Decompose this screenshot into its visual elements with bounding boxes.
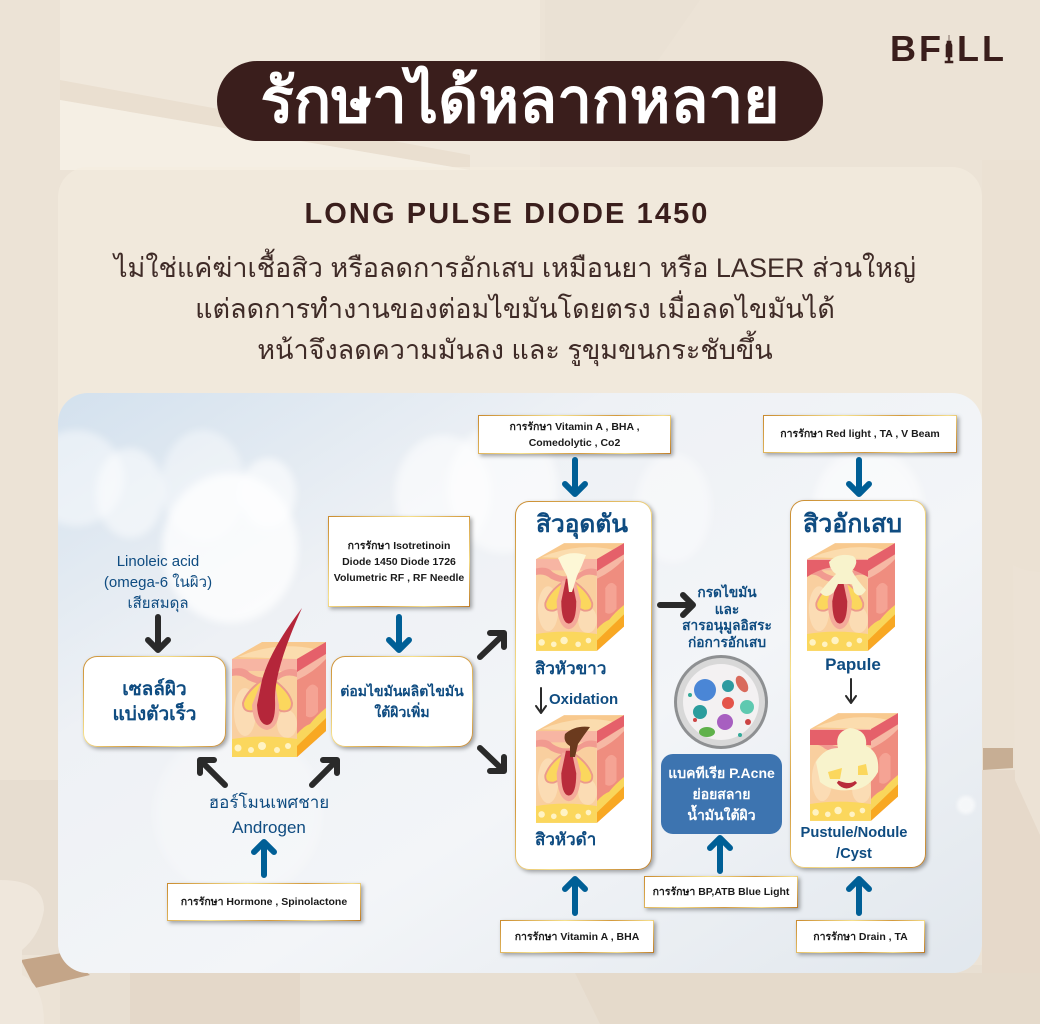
arrow: gland to blackhead	[480, 748, 504, 771]
label: linoleic acid: Linoleic acid	[117, 553, 199, 570]
text: fatty acids	[682, 584, 772, 650]
logo: BFILL: BFILL	[890, 28, 1007, 69]
panel: inflamed acne	[790, 500, 926, 868]
label: whitehead: สิวหัวขาว	[535, 659, 606, 678]
treatment: isotretinoin: Volumetric RF , RF Needle	[334, 572, 464, 584]
treatment: isotretinoin: การรักษา Isotretinoin	[348, 540, 450, 552]
label: pustule nodule cyst: /Cyst	[836, 846, 872, 862]
box: p acnes: น้ำมันใต้ผิว	[687, 806, 756, 822]
panel: cream content card	[58, 167, 982, 973]
treatment: comedone bottom	[500, 920, 654, 953]
icon: whitehead cube	[536, 543, 624, 651]
label: linoleic acid: เสียสมดุล	[127, 595, 189, 612]
icon: papule cube	[807, 543, 895, 651]
arrow: linoleic to cells	[148, 617, 168, 650]
arrow: top treatment to inflamed	[849, 460, 869, 494]
treatment: hormone	[167, 883, 361, 921]
text: fatty acids: ก่อการอักเสบ	[688, 634, 766, 650]
arrow: papule to cyst	[846, 679, 856, 703]
icon: hair follicle cube	[232, 608, 326, 757]
panel: diagram backdrop	[58, 393, 982, 973]
box: skin cells	[83, 656, 226, 747]
treatment: inflammation top: การรักษา Red light , TA , V Beam	[780, 428, 940, 440]
arrow: bottom treatment to comedone	[565, 879, 585, 913]
label: androgen	[209, 792, 329, 837]
text block: description: หน้าจึงลดความมันลง และ รูขุมขนกระชับขึ้น	[257, 335, 773, 365]
label: papule: Papule	[825, 655, 881, 674]
label: pustule nodule cyst: Pustule/Nodule	[801, 825, 907, 841]
arrow: gland to whitehead	[480, 633, 504, 657]
icon: syringe	[944, 35, 954, 64]
arrow: top treatment to comedone	[565, 460, 585, 494]
text: fatty acids: และ	[715, 602, 739, 616]
label: oxidation: Oxidation	[549, 691, 618, 708]
treatment: bacteria	[644, 876, 798, 908]
treatment: inflammation top	[763, 415, 957, 453]
arrow: androgen to cells	[200, 760, 225, 785]
heading: comedonal acne: สิวอุดตัน	[536, 511, 628, 538]
treatment: hormone: การรักษา Hormone , Spinolactone	[181, 896, 347, 908]
treatment: comedone bottom: การรักษา Vitamin A , BHA	[515, 930, 639, 942]
treatment: comedone top: การรักษา Vitamin A , BHA ,	[509, 420, 640, 432]
text block: description: แต่ลดการทำงานของต่อมไขมันโดยตรง เมื่อลดไขมันได้	[195, 294, 835, 324]
text: fatty acids: สารอนุมูลอิสระ	[682, 618, 772, 633]
treatment: drain	[796, 920, 925, 953]
treatment: bacteria: การรักษา BP,ATB Blue Light	[653, 886, 789, 898]
box: p acnes: แบคทีเรีย P.Acne	[668, 764, 775, 780]
label: blackhead: สิวหัวดำ	[535, 830, 596, 849]
panel: comedonal acne	[515, 501, 652, 870]
treatment: comedone top	[478, 415, 671, 454]
label: androgen: ฮอร์โมนเพศชาย	[209, 793, 329, 812]
box: skin cells: เซลล์ผิว	[122, 678, 187, 700]
treatment: isotretinoin	[328, 516, 470, 607]
text block: description	[112, 248, 916, 366]
treatment: isotretinoin: Diode 1450 Diode 1726	[342, 556, 456, 568]
arrow: hormone to androgen	[254, 842, 274, 875]
title pill: รักษาได้หลากหลาย	[260, 67, 780, 136]
arrow: isotretinoin to gland	[389, 617, 409, 650]
arrow: androgen to gland	[312, 760, 337, 785]
treatment: comedone top: Comedolytic , Co2	[529, 436, 620, 448]
box: p acnes	[661, 754, 782, 834]
arrow: drain to inflamed	[849, 879, 869, 913]
icon: blackhead cube	[536, 715, 624, 823]
label: pustule nodule cyst	[801, 825, 907, 862]
treatment: drain: การรักษา Drain , TA	[813, 930, 908, 942]
icon: cyst cube	[810, 713, 898, 821]
icon: petri dish	[674, 655, 768, 749]
label: linoleic acid: (omega-6 ในผิว)	[104, 574, 212, 591]
text: fatty acids: กรดไขมัน	[697, 585, 757, 600]
arrow: oxidation	[536, 688, 546, 713]
box: sebaceous gland: ใต้ผิวเพิ่ม	[374, 704, 430, 720]
arrow: to fatty acids	[660, 595, 693, 615]
box: p acnes: ย่อยสลาย	[692, 786, 750, 802]
box: sebaceous gland	[331, 656, 473, 747]
heading: inflamed acne: สิวอักเสบ	[803, 510, 902, 538]
label: androgen: Androgen	[232, 818, 306, 837]
heading: LONG PULSE DIODE 1450	[304, 198, 710, 230]
arrow: bp to bacteria	[710, 838, 730, 871]
box: sebaceous gland: ต่อมไขมันผลิตไขมัน	[340, 682, 464, 698]
text block: description: ไม่ใช่แค่ฆ่าเชื้อสิว หรือลดการอักเสบ เหมือนยา หรือ LASER ส่วนใหญ่	[114, 253, 916, 283]
label: linoleic acid	[104, 553, 212, 612]
box: skin cells: แบ่งตัวเร็ว	[113, 704, 196, 724]
